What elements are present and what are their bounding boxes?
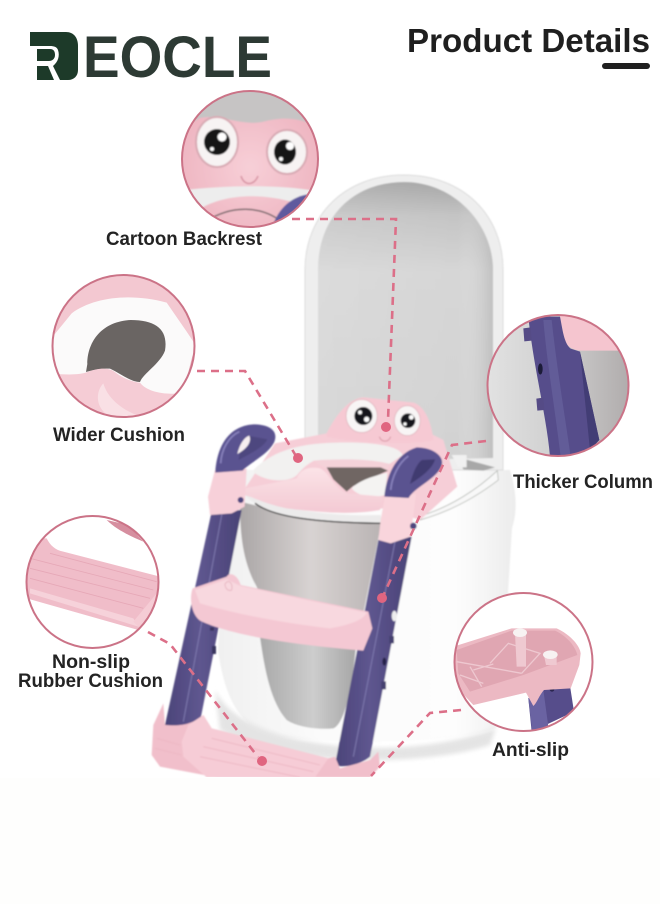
callout line: wider cushion xyxy=(197,371,303,463)
toilet rim xyxy=(420,471,498,520)
toilet lid xyxy=(305,175,503,470)
label: Anti-slip: Anti-slip xyxy=(492,740,569,761)
panel: thicker column close-up xyxy=(487,313,630,457)
frog eyes and mouth xyxy=(346,399,420,441)
logo: REOCLE: R xyxy=(60,52,77,79)
toilet body xyxy=(218,470,516,742)
label: Non-slip Rubber Cushion: Rubber Cushion xyxy=(18,671,163,692)
right collar xyxy=(378,508,414,544)
product: toilet with potty ladder xyxy=(152,175,516,777)
callout line: non-slip cushion xyxy=(148,632,267,766)
panel: wider cushion close-up xyxy=(50,273,197,420)
left column xyxy=(165,510,242,727)
label: Cartoon Backrest: Cartoon Backrest xyxy=(106,229,263,250)
right handle xyxy=(384,447,442,498)
left collar xyxy=(208,469,247,515)
body floor shadow xyxy=(215,690,496,760)
label: Wider Cushion: Wider Cushion xyxy=(53,425,185,446)
panel: anti-slip close-up xyxy=(450,590,597,737)
infographic canvas xyxy=(19,28,652,777)
panel: cartoon backrest close-up xyxy=(180,90,320,232)
label: Non-slip Rubber Cushion: Non-slip xyxy=(52,652,130,673)
callout line: cartoon backrest xyxy=(292,219,396,432)
front guard xyxy=(243,468,383,513)
callout line: anti-slip xyxy=(371,710,461,776)
left handle xyxy=(215,424,275,473)
seat lip xyxy=(250,498,381,524)
panel: non-slip rubber cushion close-up xyxy=(23,513,163,653)
label: Thicker Column: Thicker Column xyxy=(513,472,653,493)
lower bowl xyxy=(260,637,357,729)
middle step xyxy=(191,574,372,651)
upper bowl xyxy=(240,502,382,613)
label: Non-slip Rubber Cushion xyxy=(18,652,163,692)
heading: Product Details: Product Details xyxy=(407,22,650,59)
right column xyxy=(335,537,412,766)
seat frame and frog head xyxy=(245,397,457,520)
logo: REOCLE: EOCLE xyxy=(83,25,272,90)
white cushion xyxy=(254,443,403,497)
lid hinge xyxy=(462,459,494,471)
ladder seat drawn at 3x local coordinates xyxy=(152,397,498,777)
base step xyxy=(152,703,380,777)
callout line: thicker column xyxy=(377,441,486,603)
